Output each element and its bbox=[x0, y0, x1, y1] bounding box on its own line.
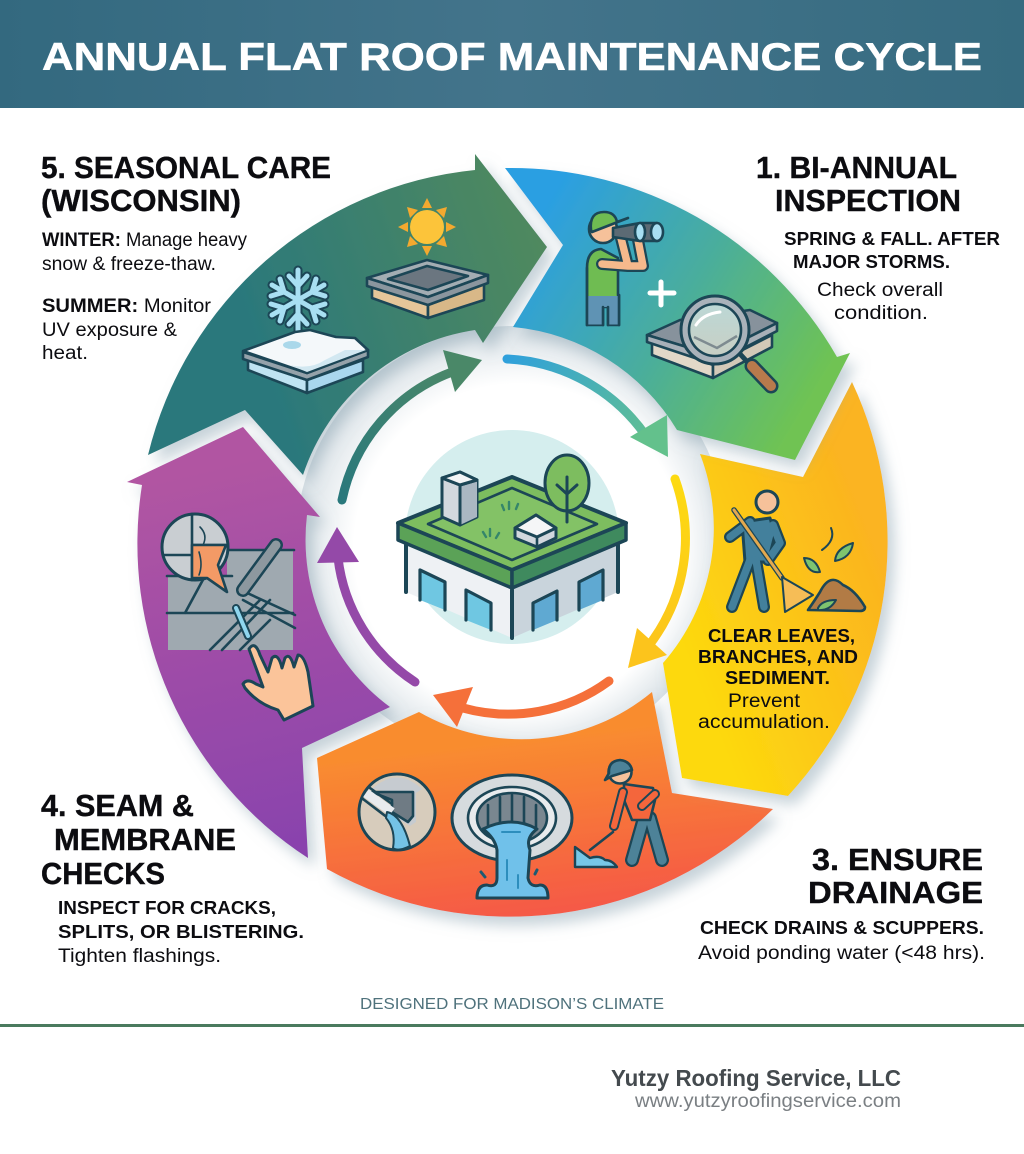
icon: snowflake bbox=[271, 270, 325, 332]
text: step 2 clear debris bbox=[698, 626, 858, 733]
text: step 1 bi-annual inspection: condition. bbox=[834, 303, 928, 324]
text: step 5 seasonal care: 5. SEASONAL CARE bbox=[41, 150, 331, 185]
text: step 4 seam and membrane checks: INSPECT FOR CRACKS, bbox=[58, 898, 276, 918]
cycle segment 3: drainage bbox=[317, 692, 773, 917]
cycle segment 1: inspection bbox=[505, 168, 850, 460]
icon: sun bbox=[398, 198, 456, 256]
title: ANNUAL FLAT ROOF MAINTENANCE CYCLE bbox=[42, 36, 982, 79]
icon: pointing hand bbox=[243, 646, 313, 720]
icon: sweeping worker bbox=[730, 491, 813, 612]
icon: central building with green roof bbox=[398, 430, 626, 644]
icon: roof drain with water bbox=[452, 775, 572, 898]
text: step 5 seasonal care: snow & freeze-thaw. bbox=[42, 254, 216, 275]
tagline: DESIGNED FOR MADISON’S CLIMATE bbox=[360, 996, 664, 1013]
inner arrow: teal bbox=[342, 350, 482, 500]
inner arrow: orange bbox=[433, 681, 609, 727]
text: step 4 seam and membrane checks: MEMBRANE bbox=[54, 822, 236, 857]
inner arrow: blue bbox=[507, 359, 668, 457]
footer company name and website bbox=[611, 1065, 901, 1112]
text: step 5 seasonal care: heat. bbox=[42, 343, 88, 364]
text: step 5 seasonal care bbox=[41, 150, 331, 364]
text: step 4 seam and membrane checks bbox=[41, 788, 304, 967]
text: step 2 clear debris: Prevent bbox=[728, 691, 801, 712]
text: step 5 seasonal care: (WISCONSIN) bbox=[41, 183, 241, 218]
text: step 5 seasonal care: SUMMER: Monitor bbox=[42, 296, 212, 317]
header banner bbox=[0, 0, 1024, 108]
text: step 2 clear debris: CLEAR LEAVES, bbox=[708, 626, 855, 646]
text: step 1 bi-annual inspection: Check overall bbox=[817, 280, 943, 301]
footer rule bbox=[0, 1024, 1024, 1027]
text: step 1 bi-annual inspection: 1. BI-ANNUAL bbox=[756, 150, 957, 185]
text: step 3 ensure drainage: DRAINAGE bbox=[808, 875, 983, 910]
text: step 2 clear debris: accumulation. bbox=[698, 712, 830, 733]
text: step 1 bi-annual inspection: INSPECTION bbox=[775, 183, 961, 218]
text: step 3 ensure drainage bbox=[698, 842, 985, 964]
icon: flat roof under sun bbox=[367, 260, 488, 318]
cycle segment 4: seam and membrane bbox=[127, 427, 390, 858]
cycle segment 2: clear debris bbox=[663, 382, 888, 796]
inner arrow: yellow bbox=[628, 479, 685, 668]
text: step 5 seasonal care: UV exposure & bbox=[42, 320, 177, 341]
text: step 5 seasonal care: WINTER: Manage heavy bbox=[42, 230, 247, 251]
text: step 4 seam and membrane checks: SPLITS, OR BLISTERING. bbox=[58, 922, 304, 942]
text: step 2 clear debris: BRANCHES, AND bbox=[698, 647, 858, 667]
icon: scupper detail circle bbox=[359, 774, 435, 850]
icon: plus sign bbox=[650, 282, 674, 305]
text: step 3 ensure drainage: CHECK DRAINS & SCUPPERS. bbox=[700, 918, 984, 938]
icon: caulking tool bbox=[236, 545, 276, 636]
cycle segment 5: seasonal care bbox=[148, 154, 547, 475]
text: step 3 ensure drainage: 3. ENSURE bbox=[812, 842, 983, 877]
footer company name and website: Yutzy Roofing Service, LLC bbox=[611, 1065, 901, 1091]
text: step 1 bi-annual inspection: MAJOR STORMS. bbox=[793, 252, 950, 272]
text: step 4 seam and membrane checks: CHECKS bbox=[41, 856, 165, 891]
text: step 2 clear debris: SEDIMENT. bbox=[725, 668, 830, 688]
inner shaded disc bbox=[296, 326, 728, 758]
icon: worker with shovel bbox=[575, 760, 662, 867]
icon: inspector with binoculars bbox=[587, 212, 663, 325]
inner arrow: purple bbox=[317, 527, 415, 682]
text: step 1 bi-annual inspection: SPRING & FALL. AFTER bbox=[784, 229, 1000, 249]
text: step 4 seam and membrane checks: Tighten flashings. bbox=[58, 946, 221, 967]
text: step 1 bi-annual inspection bbox=[756, 150, 1000, 324]
text: step 3 ensure drainage: Avoid ponding water (<48 hrs). bbox=[698, 943, 985, 964]
icon: magnifying glass over roof bbox=[647, 296, 777, 386]
footer company name and website: www.yutzyroofingservice.com bbox=[634, 1091, 901, 1112]
icon: cracked seam panel bbox=[162, 514, 295, 650]
text: step 4 seam and membrane checks: 4. SEAM & bbox=[41, 788, 194, 823]
icon: leaves and debris pile bbox=[804, 528, 865, 611]
icon: snow covered roof bbox=[243, 330, 368, 393]
